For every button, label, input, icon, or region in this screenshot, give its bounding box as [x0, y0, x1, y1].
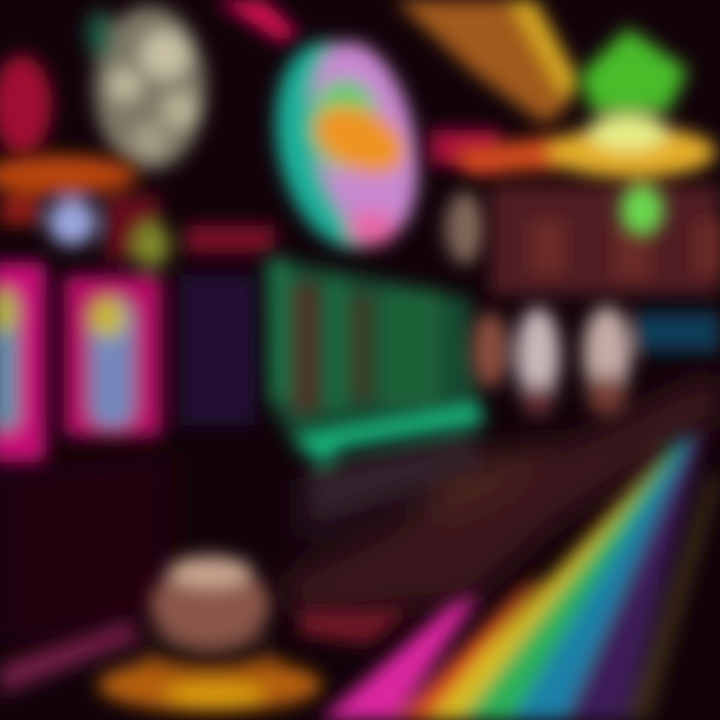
- green screen: [265, 255, 484, 515]
- rainbow stripes: [320, 430, 720, 720]
- left cabinets: [0, 155, 275, 462]
- hanging green lamp: [450, 28, 716, 236]
- ceiling beam: [215, 0, 582, 125]
- neon sign: [258, 29, 485, 264]
- burger and plate: [0, 556, 410, 712]
- white figures: [472, 306, 720, 416]
- right wall: [430, 130, 720, 295]
- top left decorations: [0, 6, 206, 170]
- counter floor: [0, 370, 720, 650]
